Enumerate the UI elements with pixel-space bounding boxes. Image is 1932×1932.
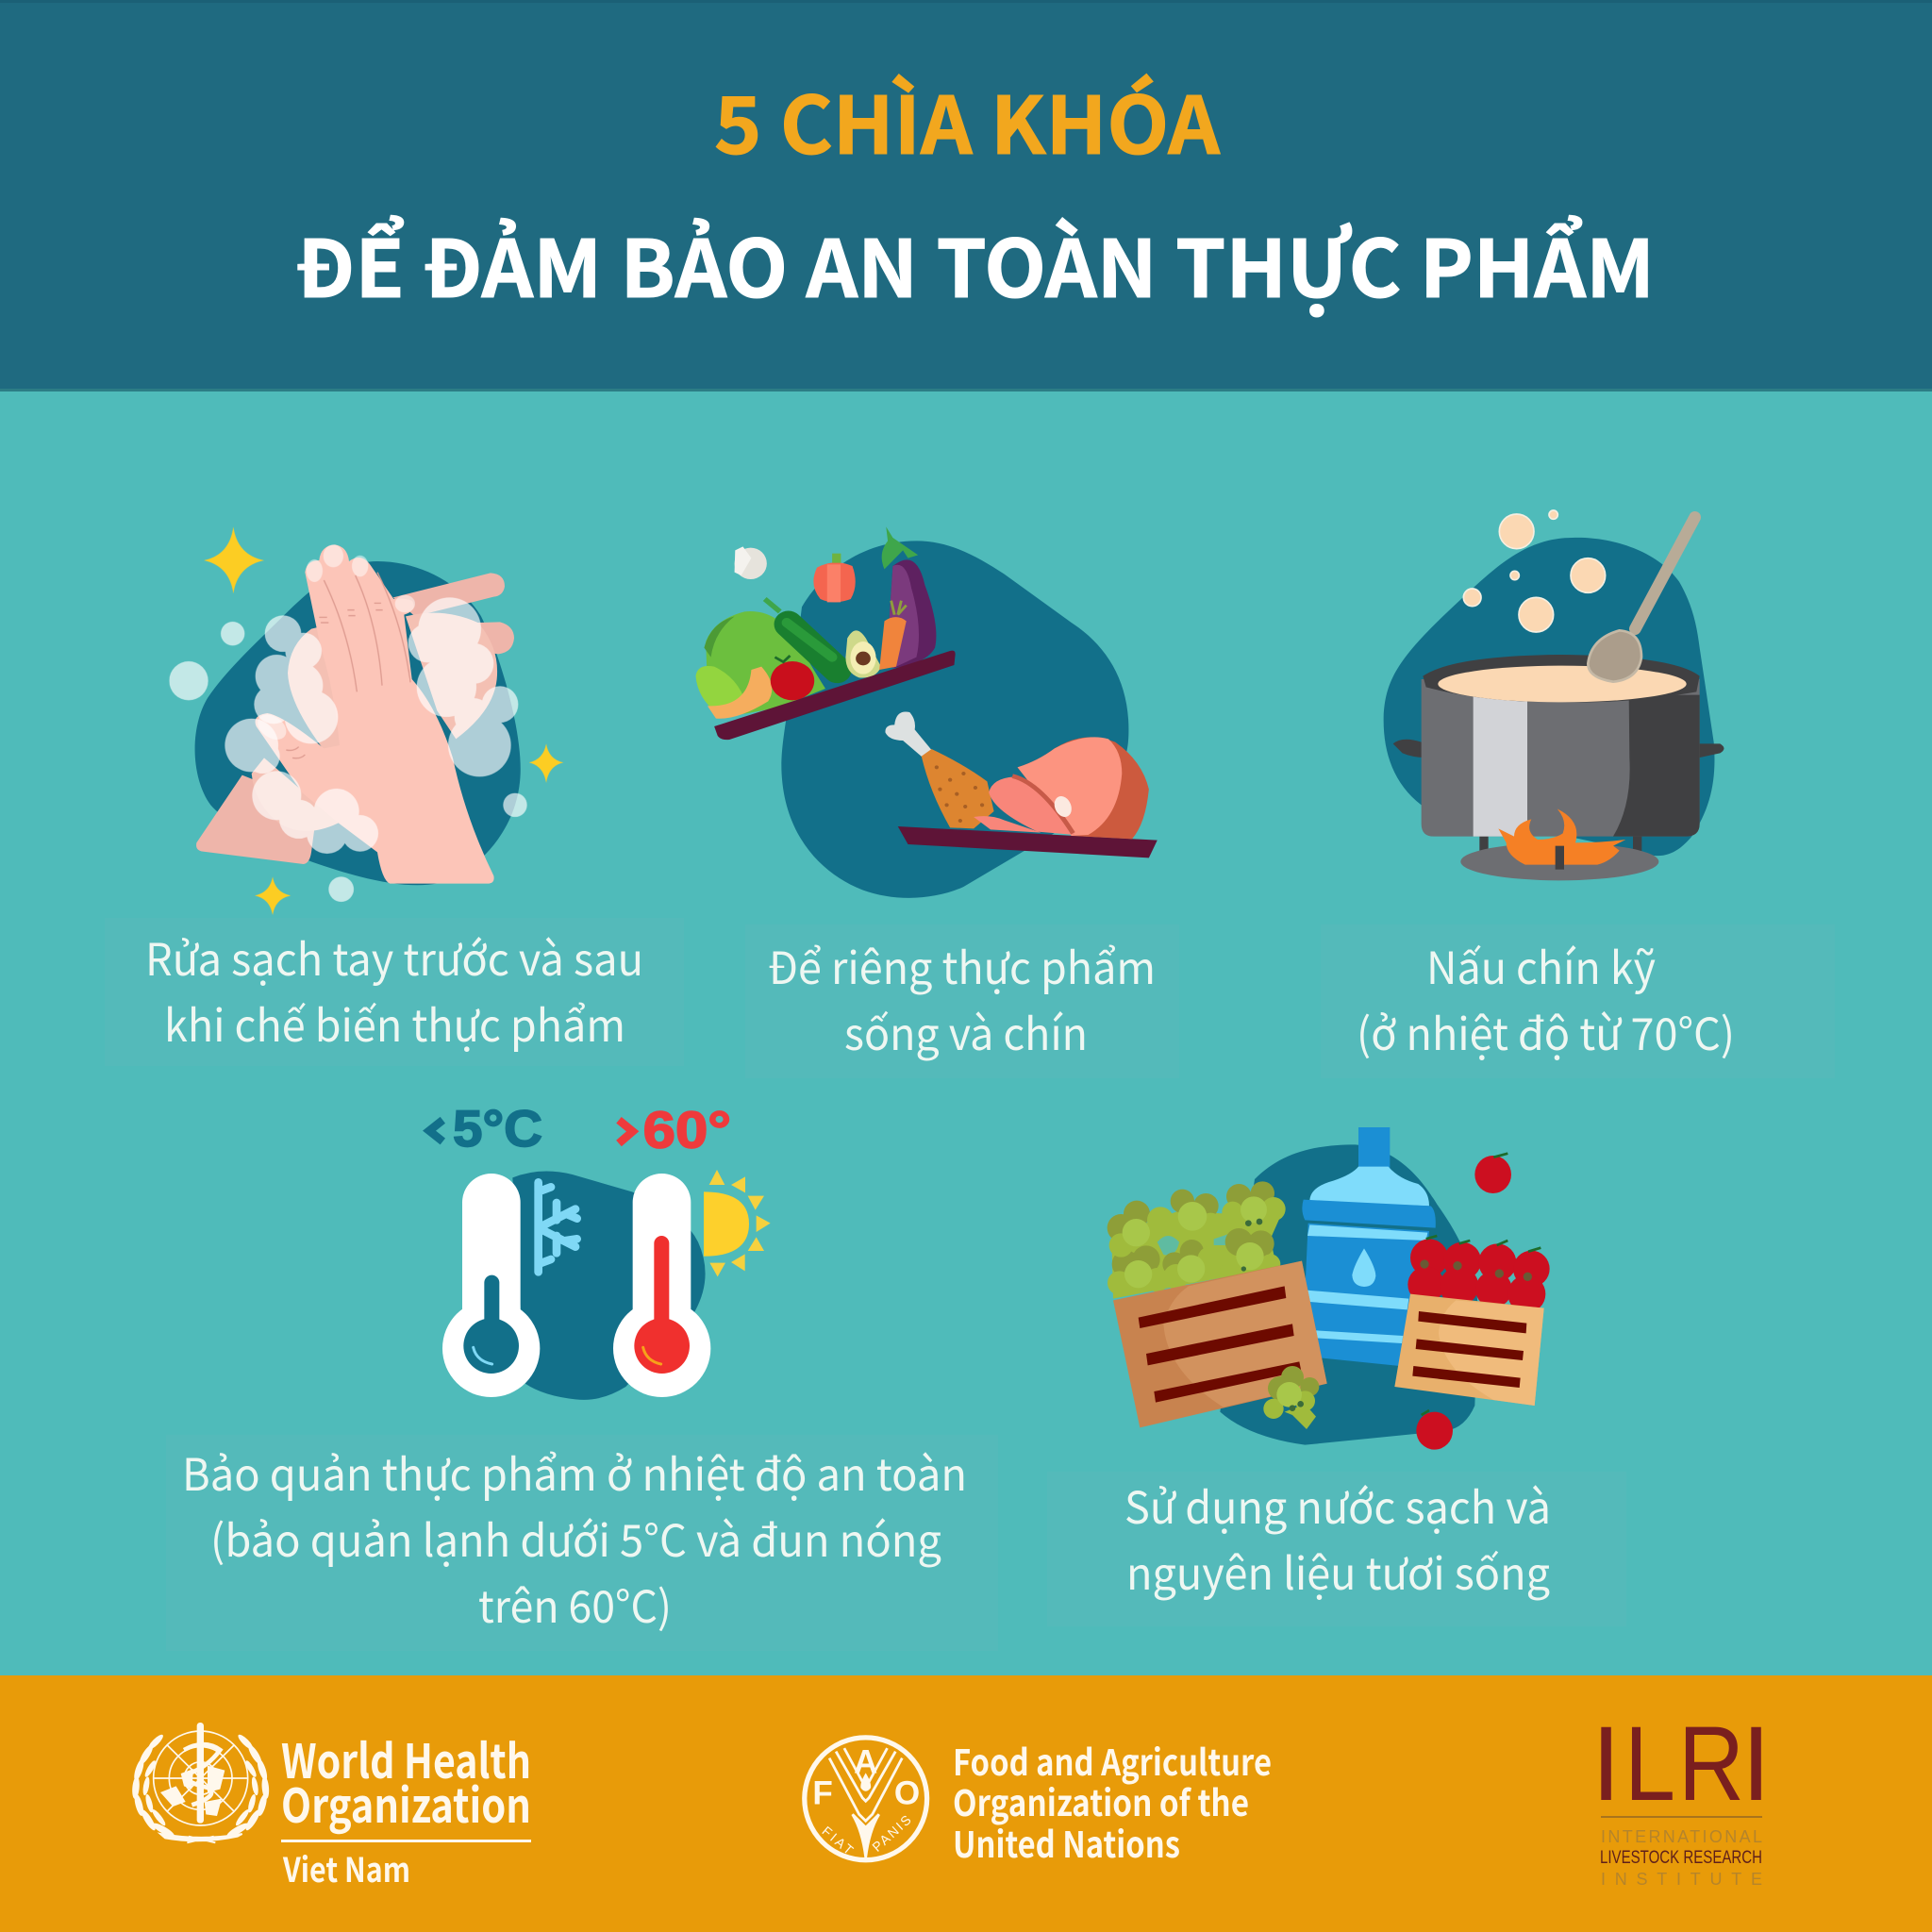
icon: separate raw and cooked food <box>695 526 1158 898</box>
caption 2: Để riêng thực phẩm <box>768 932 1156 997</box>
logo: ILRI: LIVESTOCK RESEARCH <box>1600 1848 1762 1868</box>
FAO name: Food and Agriculture <box>953 1734 1272 1786</box>
caption 2 <box>745 924 1179 1078</box>
FAO name: United Nations <box>953 1816 1180 1868</box>
logo: ILRI: R <box>1678 1705 1744 1823</box>
icon: thermometers <box>429 1099 771 1400</box>
caption 4: (bảo quản lạnh dưới 5°C và đun nóng <box>210 1505 941 1570</box>
logo: FAO <box>805 1738 927 1860</box>
caption 1 <box>105 918 684 1066</box>
logo: FAO: PANIS <box>869 1810 915 1855</box>
logo: ILRI: I <box>1591 1705 1621 1823</box>
apple crate <box>1394 1236 1550 1406</box>
caption 5 <box>1047 1472 1626 1626</box>
header band <box>0 0 1932 391</box>
loose apples <box>1416 1156 1511 1450</box>
emblem <box>131 1723 270 1842</box>
WHO name <box>281 1724 531 1892</box>
icon: hand washing <box>169 526 563 915</box>
logo: FAO: O <box>894 1775 920 1812</box>
FAO name: Organization of the <box>953 1774 1249 1826</box>
icon: clean water and fresh produce <box>1108 1127 1550 1450</box>
caption 2: sống và chín <box>844 998 1088 1063</box>
WHO name: Organization <box>281 1769 531 1837</box>
title line 1: 5 CHÌA KHÓA <box>714 63 1221 177</box>
caption 1: khi chế biến thực phẩm <box>164 990 625 1055</box>
logo: WHO <box>131 1723 270 1842</box>
caption 4 <box>166 1435 998 1651</box>
caption 3: (ở nhiệt độ từ 70°C) <box>1357 998 1735 1063</box>
caption 4: Bảo quản thực phẩm ở nhiệt độ an toàn <box>182 1439 967 1504</box>
logo: FAO: A <box>854 1743 877 1780</box>
broccoli crate <box>1108 1181 1327 1429</box>
icon: thermometers: 60° <box>643 1101 731 1159</box>
WHO name: Viet Nam <box>282 1843 410 1892</box>
logo: FAO: FIAT <box>819 1824 858 1859</box>
caption 4: trên 60°C) <box>478 1571 672 1636</box>
caption 3: Nấu chín kỹ <box>1426 932 1656 997</box>
icon: thermometers: 5°C <box>453 1099 542 1158</box>
logo: ILRI: INSTITUTE <box>1601 1870 1762 1889</box>
logo: ILRI <box>1591 1705 1771 1889</box>
caption 3 <box>1321 924 1835 1078</box>
logo: ILRI: I <box>1741 1705 1771 1823</box>
logo: FAO: F <box>812 1775 833 1812</box>
caption 1: Rửa sạch tay trước và sau <box>145 924 643 989</box>
logo: ILRI: L <box>1624 1705 1675 1823</box>
WHO name: World Health <box>281 1724 531 1792</box>
footer band <box>0 1675 1932 1932</box>
FAO name <box>953 1734 1272 1868</box>
logo: ILRI: INTERNATIONAL <box>1601 1827 1762 1846</box>
title line 2: ĐỂ ĐẢM BẢO AN TOÀN THỰC PHẨM <box>295 207 1655 321</box>
caption 5: nguyên liệu tươi sống <box>1126 1538 1550 1603</box>
caption 5: Sử dụng nước sạch và <box>1124 1472 1551 1537</box>
icon: cooking pot <box>1384 510 1724 880</box>
